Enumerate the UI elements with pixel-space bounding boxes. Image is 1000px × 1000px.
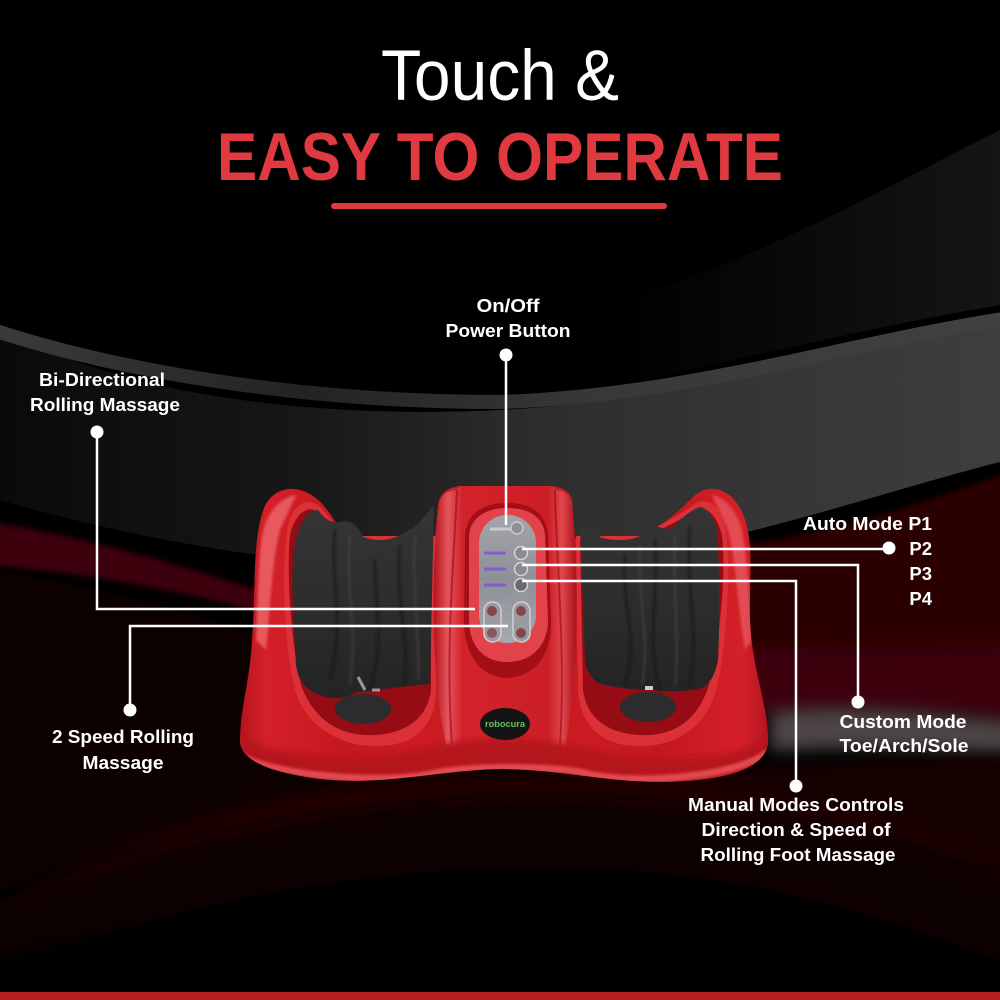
title line: EASY TO OPERATE: EASY TO OPERATE <box>217 119 783 195</box>
label: custom mode: Custom Mode <box>840 711 966 732</box>
label: auto mode presets: P2 <box>909 538 932 559</box>
panel power button <box>490 522 523 534</box>
label: 2 speed rolling massage: Massage <box>82 752 164 773</box>
title line: Touch &: Touch & <box>381 37 619 116</box>
bottom red bar <box>0 992 1000 1000</box>
label: on/off power button: On/Off <box>476 295 540 316</box>
title <box>217 37 783 209</box>
left foot pad <box>335 694 391 724</box>
body highlights <box>256 495 752 650</box>
label: manual modes controls: Rolling Foot Massage <box>700 844 896 865</box>
robocura logo badge: robocura <box>485 719 526 729</box>
foot massager product <box>235 486 775 800</box>
control panel recess <box>464 503 551 678</box>
label: manual modes controls: Manual Modes Controls <box>688 794 904 815</box>
left foot well rim <box>284 502 436 746</box>
center housing <box>434 486 576 749</box>
left cloth sleeve <box>292 505 434 698</box>
label: on/off power button: Power Button <box>446 320 570 341</box>
left zipper pull <box>358 677 380 690</box>
right zipper pull <box>645 686 653 690</box>
label: manual modes controls: Direction & Speed of <box>702 819 891 840</box>
cloth folds <box>330 525 694 690</box>
label: auto mode presets: Auto Mode P1 <box>803 513 932 534</box>
right foot pad <box>620 692 676 722</box>
label: manual modes controls <box>688 794 904 865</box>
label: auto mode presets <box>803 513 933 609</box>
label: bi-directional rolling massage: Bi-Directional <box>39 369 165 390</box>
panel manual buttons <box>484 602 530 642</box>
control panel <box>479 515 536 643</box>
label: custom mode <box>840 711 968 756</box>
callout lines <box>97 360 888 785</box>
label: auto mode presets: P4 <box>909 588 933 609</box>
robocura logo badge <box>480 708 530 740</box>
label: 2 speed rolling massage: 2 Speed Rolling <box>52 726 194 747</box>
label: bi-directional rolling massage: Rolling Massage <box>30 394 180 415</box>
right foot well rim <box>576 501 728 746</box>
label: on/off power button <box>446 295 570 341</box>
label: custom mode: Toe/Arch/Sole <box>840 735 968 756</box>
base lip <box>240 738 768 782</box>
panel sliders <box>484 546 528 592</box>
label: 2 speed rolling massage <box>52 726 194 773</box>
right cloth sleeve <box>580 507 719 691</box>
callout dots <box>90 348 896 792</box>
massager body <box>240 486 768 782</box>
title underline <box>331 203 667 209</box>
label: auto mode presets: P3 <box>909 563 932 584</box>
label: bi-directional rolling massage <box>30 369 180 415</box>
